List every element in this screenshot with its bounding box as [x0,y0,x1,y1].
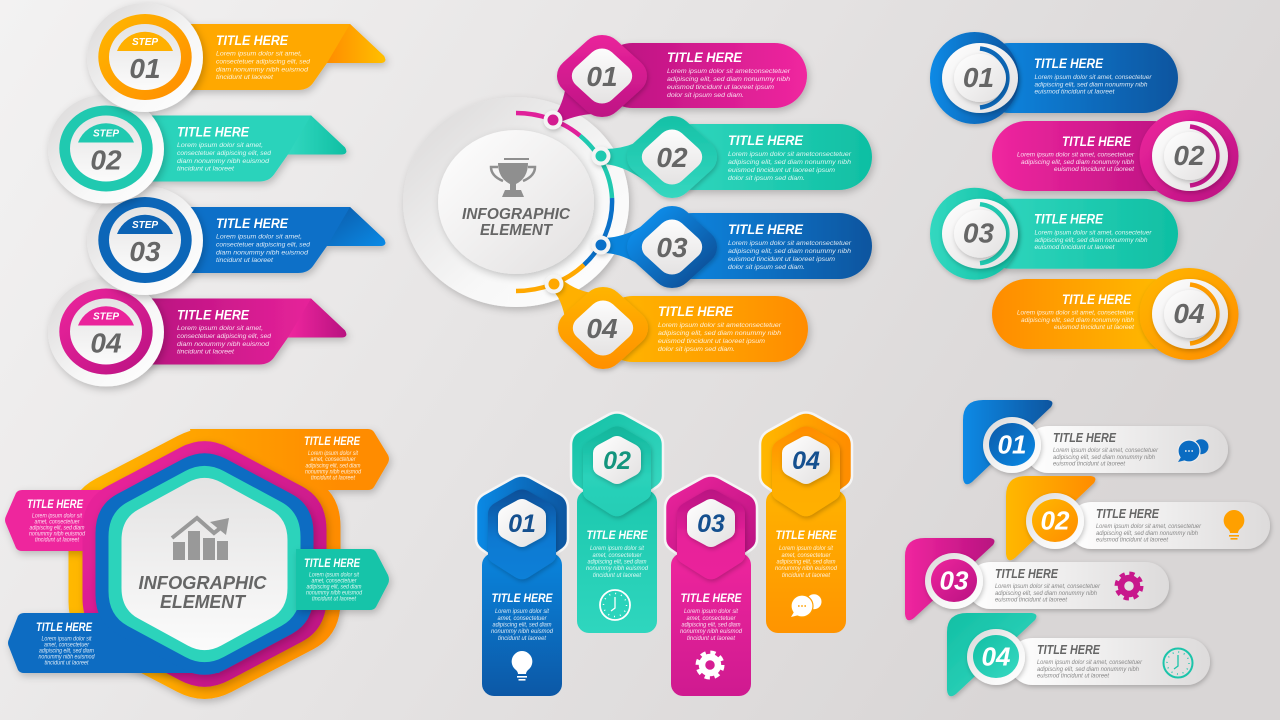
icon: gear [698,653,722,677]
callout 02: euismod tincidunt ut laoreet ipsum [728,167,835,174]
step 02 row: diam nonummy nibh euismod [177,158,269,165]
icon: gear magenta [1117,574,1141,598]
pill 01: euismod tincidunt ut laoreet [1034,88,1116,96]
card 01: adipiscing elit, sed diam [492,622,552,628]
callout 02: TITLE HERE [728,133,804,148]
step 03 row: consectetuer adipiscing elit, sed [216,242,310,248]
label text: blue [36,622,95,666]
hub title: ELEMENT [480,222,553,239]
step 02 row: consectetuer adipiscing elit, sed [177,150,271,157]
card 03: nonummy nibh euismod [680,629,743,635]
pill 02: Lorem ipsum dolor sit amet, consectetuer [1017,152,1135,158]
pill 02: TITLE HERE [1062,134,1132,149]
callout 04: 04 [586,313,618,344]
callout 04 [544,274,808,377]
pill 02: 02 [1173,140,1205,171]
callout 02: dolor sit ipsum sed diam. [728,175,805,182]
row 03 [905,538,1169,620]
step 01 row: consectetuer adipiscing elit, sed [216,58,310,66]
hexagon title [138,572,267,612]
callout 01: adipiscing elit, sed diam nonummy nibh [667,76,790,83]
callout 04: TITLE HERE [658,304,734,319]
card 01: amet, consectetuer [498,616,547,622]
row 02: 02 [1041,506,1070,536]
card 04: 04 [792,447,820,475]
white hexagon centre [122,478,288,650]
label text: pink [27,499,86,544]
hexagon title: INFOGRAPHIC [138,572,267,593]
pill 04 [992,268,1238,360]
label text: teal [304,558,363,602]
callout 04: Lorem ipsum dolor sit ametconsectetuer [658,322,782,329]
card 01: TITLE HERE [492,593,553,605]
callout 04: adipiscing elit, sed diam nonummy nibh [658,330,781,337]
teal hexagon layer [108,466,300,662]
step 01 row: diam nonummy nibh euismod [216,66,308,74]
step 03 row: Lorem ipsum dolor sit amet, [216,234,302,240]
panel: layered hexagon (bottom left) [5,429,389,699]
callout 03: TITLE HERE [728,222,804,237]
panel: circle hub with callouts (top centre) [403,27,872,377]
icon: clock teal [1164,648,1192,678]
step 02 row: 02 [90,144,122,176]
label text: teal: tincidunt ut laoreet [312,596,356,602]
step 02 row: Lorem ipsum dolor sit amet, [177,142,263,149]
step 03 row: STEP [132,220,158,231]
hub title: INFOGRAPHIC [462,206,571,223]
label text: orange: Lorem ipsum dolor sit [308,451,358,457]
label text: blue: nonummy nibh euismod [38,654,95,660]
card 02: Lorem ipsum dolor sit [590,546,644,552]
card 03: TITLE HERE [680,593,742,605]
callout 04: euismod tincidunt ut laoreet ipsum [658,338,765,345]
step 01 row: Lorem ipsum dolor sit amet, [216,50,302,58]
card 02: tincidunt ut laoreet [593,573,641,579]
icon: rising bar chart [172,518,229,560]
label text: pink: nonummy nibh euismod [29,532,86,538]
row 01 [963,400,1228,484]
callout 01: Lorem ipsum dolor sit ametconsectetuer [667,68,791,75]
step 04 row: Lorem ipsum dolor sit amet, [177,325,263,332]
callout 01: dolor sit ipsum sed diam. [667,92,744,99]
step 01 row: 01 [129,53,161,84]
row 03: TITLE HERE [995,566,1058,581]
row 03: adipiscing elit, sed diam nonummy nibh [995,590,1097,597]
label text: teal: amet, consectetuer [312,578,357,584]
card 01: 01 [508,510,536,538]
pill 04: 04 [1173,298,1205,329]
callout 03: dolor sit ipsum sed diam. [728,264,805,271]
icon: chat bubbles blue [1178,439,1208,462]
card 04: TITLE HERE [776,530,837,542]
card 03: amet, consectetuer [686,616,736,622]
label text: teal: TITLE HERE [304,558,360,570]
label text: orange: adipiscing elit, sed diam [306,464,360,470]
step 02 row [48,94,346,204]
pill 04: Lorem ipsum dolor sit amet, consectetuer [1017,310,1135,316]
label text: orange: TITLE HERE [304,436,360,448]
card 04: amet, consectetuer [782,553,831,559]
hexagon title: ELEMENT [160,591,247,612]
label text: blue: TITLE HERE [36,622,92,634]
row 02: Lorem ipsum dolor sit amet, consectetuer [1096,523,1202,530]
icon: chat bubbles [791,594,822,617]
panel: step ribbons (top left) [48,3,385,386]
callout 01: 01 [586,61,618,92]
row 02 [1006,476,1270,560]
row 01: euismod tincidunt ut laoreet [1053,460,1126,468]
callout 01 [544,27,807,130]
label text: pink: amet, consectetuer [34,520,80,526]
row 04: Lorem ipsum dolor sit amet, consectetuer [1037,659,1143,666]
callout 02: adipiscing elit, sed diam nonummy nibh [728,159,851,166]
orange layer with label [68,429,389,699]
step 03 row: 03 [129,236,161,267]
card 01: tincidunt ut laoreet [498,636,546,642]
teal right label [296,549,389,610]
pill 02: adipiscing elit, sed diam nonummy nibh [1021,159,1134,166]
step 04 row: consectetuer adipiscing elit, sed [177,333,271,340]
label text: blue: tincidunt ut laoreet [44,660,89,666]
callout 04: dolor sit ipsum sed diam. [658,346,735,353]
card 03: adipiscing elit, sed diam [682,622,740,628]
pill 01 [930,32,1178,124]
row 04 [947,613,1210,696]
card 03: 03 [697,510,725,538]
icon: light bulb [512,651,532,681]
step 01 row: STEP [132,37,158,48]
pill 04: adipiscing elit, sed diam nonummy nibh [1021,317,1134,324]
row 01: Lorem ipsum dolor sit amet, consectetuer [1053,447,1159,454]
step 04 row: tincidunt ut laoreet [177,348,235,356]
step 03 row: diam nonummy nibh euismod [216,250,308,256]
callout 03 [592,198,872,296]
pill 01: Lorem ipsum dolor sit amet, consectetuer [1034,74,1152,81]
row 02: adipiscing elit, sed diam nonummy nibh [1096,530,1198,537]
step 01 row [87,3,385,112]
label text: blue: Lorem ipsum dolor sit [42,636,92,642]
label text: pink: TITLE HERE [27,499,83,511]
card 02: amet, consectetuer [592,553,642,559]
pill 04: TITLE HERE [1062,292,1132,307]
label text: pink: Lorem ipsum dolor sit [32,514,82,520]
row 04: 04 [982,642,1011,672]
step 04 row: STEP [93,312,119,322]
card 04: tincidunt ut laoreet [782,573,830,579]
pill 02: euismod tincidunt ut laoreet [1054,166,1135,173]
pill 03 [930,188,1178,280]
pill 01: 01 [963,62,994,93]
label text: teal: nonummy nibh euismod [306,590,363,596]
step 04 row: TITLE HERE [177,308,250,322]
row 04: TITLE HERE [1037,642,1100,657]
card 03: Lorem ipsum dolor sit [684,609,738,615]
row 02: euismod tincidunt ut laoreet [1096,536,1169,544]
row 04: adipiscing elit, sed diam nonummy nibh [1037,666,1139,673]
card 02 [571,412,663,633]
callout 01: euismod tincidunt ut laoreet ipsum [667,84,774,91]
card 04: Lorem ipsum dolor sit [779,546,833,552]
pill 03: 03 [963,218,994,249]
step 04 row: 04 [90,328,122,358]
hub inner disc [438,130,594,274]
callout 03: 03 [656,232,688,263]
row 03: 03 [940,566,969,596]
label text: pink: adipiscing elit, sed diam [30,526,84,532]
row 03: Lorem ipsum dolor sit amet, consectetuer [995,583,1101,590]
blue layer with label [8,453,314,675]
panel: hexagon cards (bottom centre) [476,412,852,696]
callout 02: Lorem ipsum dolor sit ametconsectetuer [728,151,852,158]
step 03 row [87,186,385,295]
row 02: TITLE HERE [1096,506,1159,521]
pill 03: TITLE HERE [1034,212,1104,227]
label text: blue: amet, consectetuer [44,642,90,648]
pill 03: Lorem ipsum dolor sit amet, consectetuer [1034,230,1152,237]
step 01 row: TITLE HERE [216,33,289,48]
card 02: 02 [603,447,631,475]
card 01: Lorem ipsum dolor sit [495,609,549,615]
label text: orange: nonummy nibh euismod [305,470,362,476]
label text: blue: adipiscing elit, sed diam [39,648,94,654]
label text: orange: amet, consectetuer [310,457,356,463]
icon: light bulb orange [1224,510,1244,540]
step 01 row: tincidunt ut laoreet [216,74,274,81]
card 02: adipiscing elit, sed diam [588,560,646,566]
callout 03: Lorem ipsum dolor sit ametconsectetuer [728,240,852,247]
hub title [462,206,571,239]
panel: tabbed grey pills (bottom right) [905,400,1270,696]
label text: orange: tincidunt ut laoreet [311,476,355,482]
step 03 row: TITLE HERE [216,216,289,231]
hub outer disc [403,97,629,307]
card 01: nonummy nibh euismod [491,629,554,635]
row 01: adipiscing elit, sed diam nonummy nibh [1053,454,1155,461]
row 04: euismod tincidunt ut laoreet [1037,672,1110,680]
icon: clock [600,590,630,620]
pill 01: adipiscing elit, sed diam nonummy nibh [1034,82,1148,88]
pill 01: TITLE HERE [1034,56,1104,71]
segmented arc [516,113,612,291]
callout 03: euismod tincidunt ut laoreet ipsum [728,256,835,263]
callout 02 [592,108,872,206]
card 04: adipiscing elit, sed diam [776,560,836,566]
step 02 row: tincidunt ut laoreet [177,166,235,172]
card 02: TITLE HERE [586,530,648,542]
card 04 [760,412,852,633]
pill 04: euismod tincidunt ut laoreet [1054,324,1135,331]
panel: pills with rings (top right) [930,32,1238,360]
step 03 row: tincidunt ut laoreet [216,257,274,264]
label text: orange [304,436,362,482]
callout 01: TITLE HERE [667,50,743,65]
callout 03: adipiscing elit, sed diam nonummy nibh [728,248,851,255]
step 02 row: TITLE HERE [177,124,250,140]
card 04: nonummy nibh euismod [775,566,838,572]
card 02: nonummy nibh euismod [586,566,649,572]
row 01: TITLE HERE [1053,430,1116,445]
row 01: 01 [998,430,1026,460]
label text: pink: tincidunt ut laoreet [35,538,79,544]
callout 02: 02 [656,142,688,173]
pill 02 [992,110,1238,202]
pink layer with label [5,441,326,687]
pill 03: euismod tincidunt ut laoreet [1034,244,1116,251]
row 03: euismod tincidunt ut laoreet [995,596,1068,604]
icon: trophy [491,158,535,197]
pill 03: adipiscing elit, sed diam nonummy nibh [1034,237,1148,244]
card 03: tincidunt ut laoreet [687,636,735,642]
step 02 row: STEP [93,128,119,140]
card 03 [665,476,757,696]
step 04 row: diam nonummy nibh euismod [177,341,269,348]
step 04 row [48,278,346,386]
label text: teal: adipiscing elit, sed diam [306,584,362,590]
label text: teal: Lorem ipsum dolor sit [309,572,359,578]
card 01 [476,476,568,696]
